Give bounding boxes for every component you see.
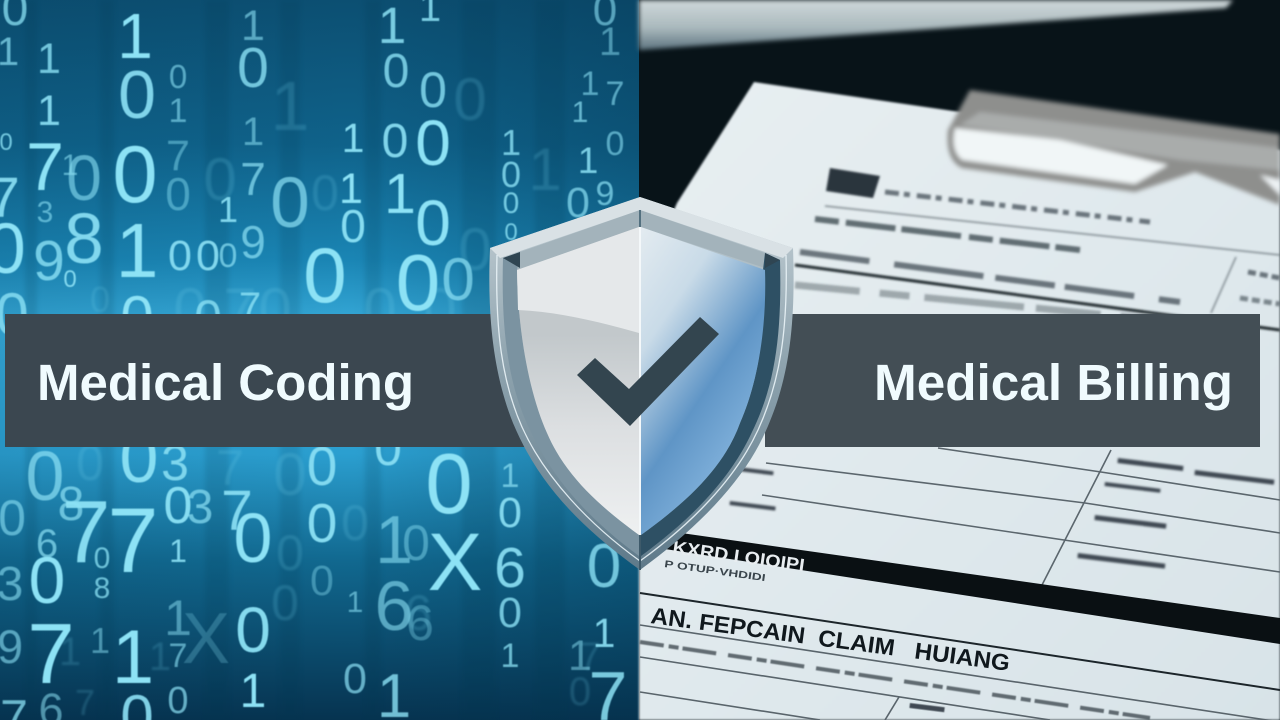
binary digit rain: X xyxy=(182,599,230,679)
binary digit rain: 0 xyxy=(343,655,367,703)
binary digit rain: 0 xyxy=(396,238,440,327)
binary digit rain: 1 xyxy=(37,35,61,83)
binary digit rain: 7 xyxy=(62,482,110,581)
binary digit rain: 0 xyxy=(383,45,409,98)
faint background digits: 0 xyxy=(76,435,104,491)
binary digit rain: 0 xyxy=(419,62,447,118)
binary digit rain: 0 xyxy=(374,420,402,476)
binary digit rain: 0 xyxy=(606,125,624,163)
binary digit rain: 1 xyxy=(169,92,187,130)
faint background digits: 0 xyxy=(258,276,292,343)
claim form sheet xyxy=(639,82,1280,720)
faint background digits: 0 xyxy=(276,525,304,581)
faint background digits: 0 xyxy=(203,146,237,213)
binary digit rain: 0 xyxy=(63,266,77,293)
faint background digits: 0 xyxy=(453,66,487,133)
binary digit rain: X xyxy=(428,517,482,608)
binary digit rain: 0 xyxy=(270,164,310,243)
binary digit rain: 3 xyxy=(187,481,213,534)
binary digit rain: 1 xyxy=(599,20,621,64)
binary digit rain: 1 xyxy=(116,208,158,294)
binary digit rain: 0 xyxy=(587,532,621,601)
label: medical billing: Medical Billing xyxy=(874,354,1233,411)
binary digit rain: 0 xyxy=(310,557,334,605)
binary digit rain: 1 xyxy=(342,115,364,161)
rules xyxy=(640,593,1280,690)
faint background digits: 0 xyxy=(458,216,492,283)
faint background digits: 0 xyxy=(173,276,207,343)
binary digit rain: 1 xyxy=(62,149,78,182)
black band xyxy=(639,527,1280,644)
binary digit rain: 0 xyxy=(169,58,187,95)
faint background digits: 0 xyxy=(273,441,307,508)
binary digit rain: 0 xyxy=(194,290,222,346)
binary digit rain: 0 xyxy=(66,142,102,214)
faint background digits: 0 xyxy=(531,236,565,303)
faint background digits: 0 xyxy=(569,670,591,714)
binary digit rain: 1 xyxy=(568,632,592,680)
faint background digits: 0 xyxy=(90,279,110,320)
binary digit rain: 0 xyxy=(120,284,154,351)
binary digit rain: 0 xyxy=(112,130,158,220)
binary digit rain: 0 xyxy=(168,232,192,280)
binary digit rain: 7 xyxy=(26,129,64,205)
binary digit rain: 1 xyxy=(501,122,521,163)
binary digit rain: 0 xyxy=(307,435,337,497)
binary digit rain: 1 xyxy=(218,189,238,230)
banner: medical coding xyxy=(5,314,525,447)
binary digit rain: 6 xyxy=(494,536,526,600)
binary digit rain: 0 xyxy=(94,542,110,575)
binary digit rain: 8 xyxy=(94,572,110,605)
panel: medical coding digital background xyxy=(0,0,639,720)
binary digit rain: 0 xyxy=(196,232,220,280)
binary digit rain: 0 xyxy=(234,499,272,577)
binary digit rain: 7 xyxy=(107,490,159,592)
top bevel xyxy=(490,197,793,258)
blurred form header rows xyxy=(795,168,1280,330)
binary digit rain: 0 xyxy=(382,115,408,168)
faint background digits: 0 xyxy=(271,575,299,631)
shield left face xyxy=(517,227,639,535)
label: medical coding: Medical Coding xyxy=(37,354,414,411)
binary digit rain: 1 xyxy=(347,586,363,619)
binary digit rain: 1 xyxy=(169,533,187,569)
faint background digits xyxy=(59,66,601,720)
form heading: KXRD I OIOIPI xyxy=(671,537,806,575)
form table grid xyxy=(762,448,1280,585)
binary digit rain: 6 xyxy=(375,567,413,645)
binary digit rain: 1 xyxy=(578,140,598,181)
binary digit rain: 8 xyxy=(58,478,84,531)
form table labels xyxy=(722,458,1274,569)
binary digit rain: 7 xyxy=(166,132,190,180)
binary digit rain: 0 xyxy=(425,437,473,532)
binary digit rain: 0 xyxy=(219,237,237,275)
binary digit rain: 1 xyxy=(501,637,519,675)
binary digit rain: 1 xyxy=(90,620,110,661)
clipboard clip xyxy=(948,90,1280,205)
small field label xyxy=(909,703,945,712)
binary digit rain: 7 xyxy=(239,285,261,329)
binary digit rain: 6 xyxy=(406,595,434,651)
claim heading text: AN. FEPCAIN CLAIM HUIANG xyxy=(649,602,1012,676)
binary digit rain: 6 xyxy=(36,522,58,566)
binary digit rain: 1 xyxy=(117,0,153,72)
faint background digits: 7 xyxy=(223,276,257,343)
binary digit rain: 1 xyxy=(241,2,265,50)
center seam xyxy=(639,227,641,535)
binary digit rain: 0 xyxy=(164,477,192,535)
left inner band xyxy=(503,252,639,556)
binary digit rain: 1 xyxy=(240,665,266,718)
binary digit rain: 8 xyxy=(64,200,104,279)
binary digit rain: 1 xyxy=(242,110,264,154)
binary digit rain: 0 xyxy=(498,589,522,637)
banner: medical billing xyxy=(765,314,1260,447)
faint background digits: 7 xyxy=(579,635,601,679)
binary digit rain: 0 xyxy=(120,419,158,497)
binary digit rain: 1 xyxy=(37,87,61,135)
binary digit rain: 0 xyxy=(26,437,64,515)
binary digit rain: 0 xyxy=(504,219,518,246)
binary digit rain: 0 xyxy=(402,515,430,571)
binary digit rain: 0 xyxy=(235,594,271,666)
binary digit rain: 3 xyxy=(161,435,189,491)
binary digit rain: 9 xyxy=(33,229,65,293)
binary digit rain: 0 xyxy=(415,187,451,259)
binary digit rain: 9 xyxy=(596,175,614,213)
panel: medical billing paper background xyxy=(639,0,1280,720)
binary digit rain: 0 xyxy=(441,246,475,313)
faint background digits: 1 xyxy=(271,67,309,145)
binary digit rain: 1 xyxy=(593,610,615,656)
binary digit rain: 7 xyxy=(221,479,253,543)
binary digit rain: 0 xyxy=(237,36,269,100)
binary digit rain: 0 xyxy=(566,179,590,227)
binary digit rain: 0 xyxy=(501,154,521,195)
faint background digits: 7 xyxy=(216,440,244,496)
binary digit rain: 7 xyxy=(27,607,75,702)
faint background digits: 0 xyxy=(341,495,369,551)
form sub heading: P OTUP·VHDIDI xyxy=(664,559,766,584)
binary digit rain: 0 xyxy=(165,168,191,220)
binary digit rain: 1 xyxy=(384,162,416,226)
binary digit rain: 1 xyxy=(501,457,519,495)
binary digit rain: 1 xyxy=(375,502,413,578)
binary digit rain: 7 xyxy=(240,153,266,205)
binary digit rain xyxy=(0,0,627,720)
claim lines xyxy=(640,642,1150,718)
faint background digits: 0 xyxy=(363,276,397,343)
binary digit rain: 1 xyxy=(164,590,192,646)
binary digit rain: 0 xyxy=(415,107,451,179)
binary digit rain: 0 xyxy=(503,187,519,220)
binary digit rain: 0 xyxy=(29,543,65,617)
faint background digits: 1 xyxy=(528,136,562,203)
corner notches xyxy=(503,252,520,268)
binary digit rain: 0 xyxy=(307,492,337,554)
shield rim xyxy=(489,197,794,570)
faint background digits: 0 xyxy=(423,276,457,343)
binary digit rain: 0 xyxy=(303,231,347,319)
right dark inner band xyxy=(641,253,780,556)
binary digit rain: 1 xyxy=(581,65,599,103)
faint background digits: 1 xyxy=(59,630,81,674)
binary digit rain: 1 xyxy=(112,615,154,700)
faint background digits: 0 xyxy=(311,165,339,221)
faint background digits: 1 xyxy=(149,635,171,679)
faint background digits: 6 xyxy=(404,585,432,641)
binary digit rain: 7 xyxy=(606,75,624,113)
left face sheen xyxy=(517,227,639,333)
thin highlight line xyxy=(497,255,786,561)
binary digit rain: 1 xyxy=(339,165,363,213)
blurred top document edge xyxy=(639,0,1233,50)
binary digit rain: 0 xyxy=(340,200,366,252)
shield right face xyxy=(641,227,765,535)
binary digit rain: 9 xyxy=(240,216,266,268)
binary digit rain: 3 xyxy=(37,196,53,229)
check mark xyxy=(577,317,719,426)
binary digit rain: 0 xyxy=(498,489,522,537)
binary digit rain: 7 xyxy=(169,637,187,675)
binary digit rain: 0 xyxy=(118,57,156,133)
icon: shield with check mark xyxy=(489,197,794,570)
binary digit rain: 1 xyxy=(572,96,588,129)
